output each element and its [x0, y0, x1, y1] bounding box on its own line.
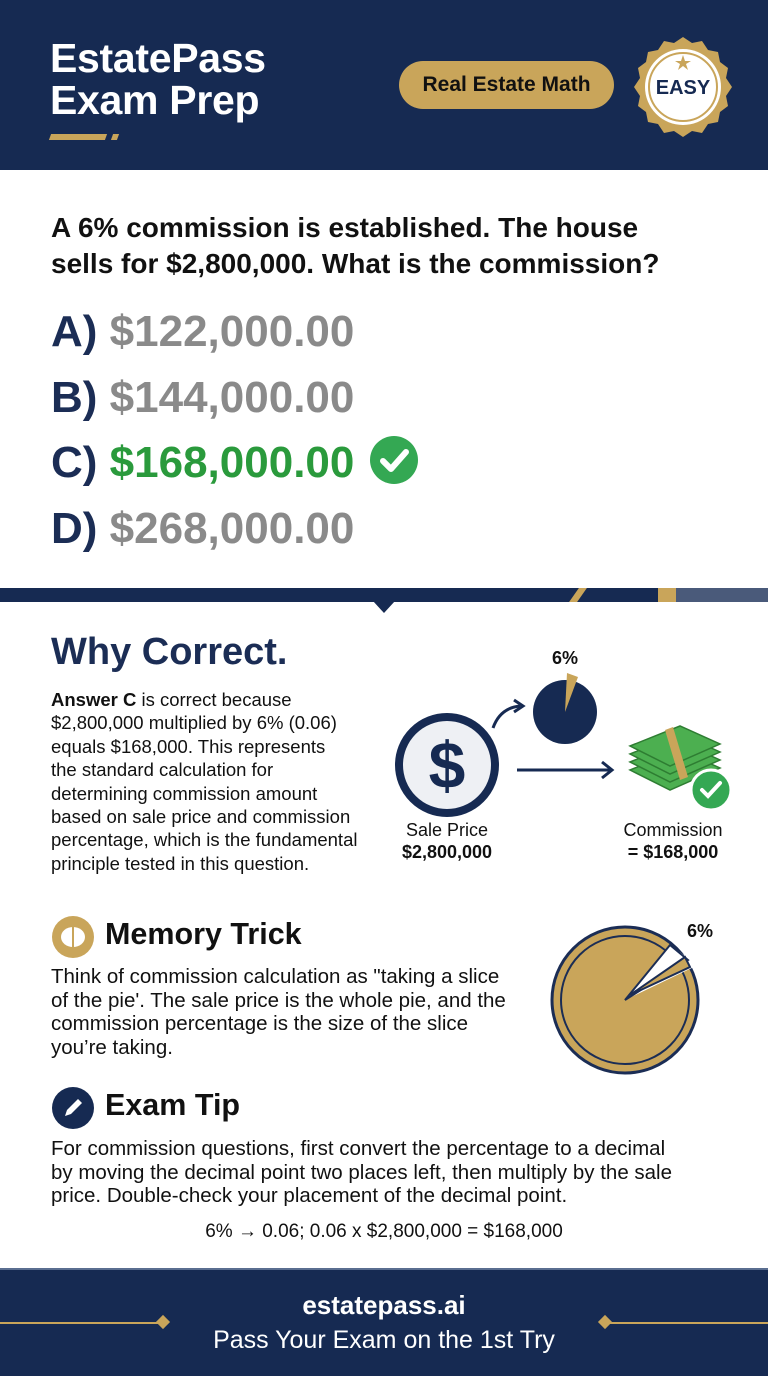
pie large: 6% — [687, 921, 713, 941]
memory trick text: commission percentage is the size of the slice — [51, 1012, 468, 1035]
icon: pencil — [52, 1087, 94, 1129]
label: commission: = $168,000 — [628, 842, 718, 862]
badge: easy: EASY — [656, 77, 711, 99]
label: sale price — [402, 820, 492, 862]
arrow: to commission — [517, 762, 612, 778]
icon: dollar coin — [399, 717, 495, 813]
option D: D) $268,000.00 — [51, 504, 354, 552]
title — [50, 35, 266, 123]
explanation text: based on sale price and commission — [51, 806, 350, 827]
label: commission — [623, 820, 723, 862]
exam tip heading: Exam Tip — [105, 1088, 240, 1122]
explanation text: equals $168,000. This represents — [51, 736, 325, 757]
exam tip text: price. Double-check your placement of the decimal point. — [51, 1184, 567, 1207]
icon: dollar coin: $ — [429, 728, 465, 802]
footer url: estatepass.ai — [302, 1290, 466, 1320]
explanation text: Answer C is correct because — [51, 689, 292, 710]
exam tip heading — [52, 1087, 240, 1129]
explanation text: determining commission amount — [51, 783, 317, 804]
explanation text: $2,800,000 multiplied by 6% (0.06) — [51, 712, 337, 733]
category pill — [399, 61, 614, 109]
pie large — [550, 921, 713, 1074]
option B: B) $144,000.00 — [51, 372, 354, 422]
diagram: calculation — [395, 648, 730, 862]
options — [51, 307, 418, 552]
explanation text: the standard calculation for — [51, 759, 273, 780]
title: Exam Prep — [50, 77, 259, 123]
exam tip text — [51, 1137, 672, 1207]
memory trick text — [51, 965, 506, 1058]
badge: easy — [634, 37, 732, 137]
explanation text: principle tested in this question. — [51, 853, 309, 874]
icon: money stack — [630, 726, 731, 810]
category pill: Real Estate Math — [422, 73, 591, 96]
question: A 6% commission is established. The house sells for $2,800,000. What is the commission? — [51, 212, 659, 279]
title underline — [49, 134, 119, 140]
label: commission: Commission — [623, 820, 723, 840]
pie small — [533, 648, 597, 744]
memory trick heading — [52, 916, 302, 958]
icon: brain — [52, 916, 94, 958]
memory trick text: Think of commission calculation as "taking a slice — [51, 965, 499, 988]
formula: 6% → 0.06; 0.06 x $2,800,000 = $168,000 — [205, 1221, 563, 1242]
option A: A) $122,000.00 — [51, 307, 354, 356]
memory trick text: of the pie'. The sale price is the whole pie, and the — [51, 988, 506, 1012]
header — [0, 0, 768, 170]
heading: why correct: Why Correct. — [51, 631, 287, 673]
explanation text — [51, 689, 357, 874]
arrow: to pie — [493, 700, 523, 728]
explanation text: percentage, which is the fundamental — [51, 829, 357, 850]
memory trick heading: Memory Trick — [105, 917, 302, 951]
footer tagline: Pass Your Exam on the 1st Try — [213, 1326, 555, 1354]
pie small: 6% — [552, 648, 578, 668]
exam tip text: by moving the decimal point two places left, then multiply by the sale — [51, 1160, 672, 1184]
title: EstatePass — [50, 35, 266, 81]
footer lines — [0, 1322, 160, 1324]
label: sale price: Sale Price — [406, 820, 488, 840]
option C correct: C) $168,000.00 — [51, 438, 354, 487]
footer — [0, 1268, 768, 1376]
label: sale price: $2,800,000 — [402, 842, 492, 862]
divider band — [0, 588, 768, 613]
memory trick text: you’re taking. — [51, 1036, 173, 1058]
exam tip text: For commission questions, first convert the percentage to a decimal — [51, 1137, 665, 1160]
